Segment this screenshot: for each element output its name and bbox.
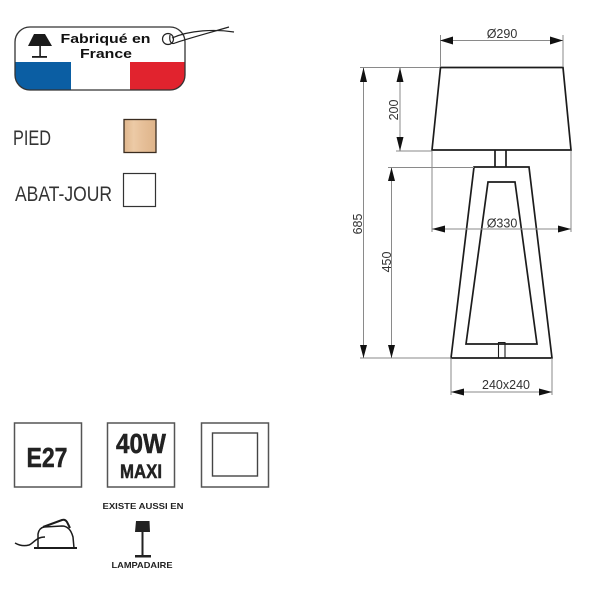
dimension: Ø290: Ø290 — [487, 27, 517, 41]
dimension: 685: 685 — [351, 214, 365, 234]
technical drawing: lamp — [432, 68, 571, 358]
stem — [495, 150, 506, 167]
swatch: white — [124, 174, 156, 206]
tag outline — [15, 27, 185, 90]
dimension: 450: 450 — [380, 252, 394, 272]
dimension: 240x240 — [451, 358, 552, 396]
dimension: 200: 200 — [387, 100, 401, 120]
tag string — [162, 27, 234, 44]
icon box: 40W maxi: MAXI — [120, 462, 162, 483]
text: EXISTE AUSSI EN: EXISTE AUSSI EN — [102, 501, 184, 511]
badge text: France: France — [80, 46, 132, 61]
label: ABAT-JOUR: ABAT-JOUR — [15, 183, 112, 206]
base foot — [498, 342, 505, 358]
base frame inner — [466, 182, 537, 344]
dimension: Ø330 — [432, 151, 571, 232]
icon: table lamp — [28, 34, 52, 58]
dimension: 240x240: 240x240 — [482, 378, 530, 392]
text: LAMPADAIRE: LAMPADAIRE — [112, 560, 173, 570]
dimension: Ø290 — [440, 27, 563, 67]
icon box: E27 socket: E27 — [26, 442, 68, 473]
dimension: 200 — [360, 68, 440, 151]
dimension: Ø330: Ø330 — [487, 216, 517, 230]
swatch: wood — [124, 120, 156, 152]
icon box: double insulation class II — [202, 423, 268, 487]
icon box: 40W maxi — [108, 423, 174, 487]
badge: Fabriqué en France — [15, 27, 234, 91]
icon: floor lamp — [135, 521, 151, 558]
dimension: 450 — [380, 168, 474, 358]
icon box: E27 socket — [14, 423, 82, 487]
label: PIED: PIED — [13, 127, 51, 150]
badge text: Fabriqué en — [60, 31, 151, 46]
icon box: 40W maxi: 40W — [116, 428, 166, 459]
dimension: 685 — [351, 68, 451, 358]
base frame outer — [451, 167, 552, 358]
flag stripes — [15, 62, 186, 91]
icon: iron / switch with cord — [15, 520, 77, 548]
lamp shade — [432, 68, 571, 150]
